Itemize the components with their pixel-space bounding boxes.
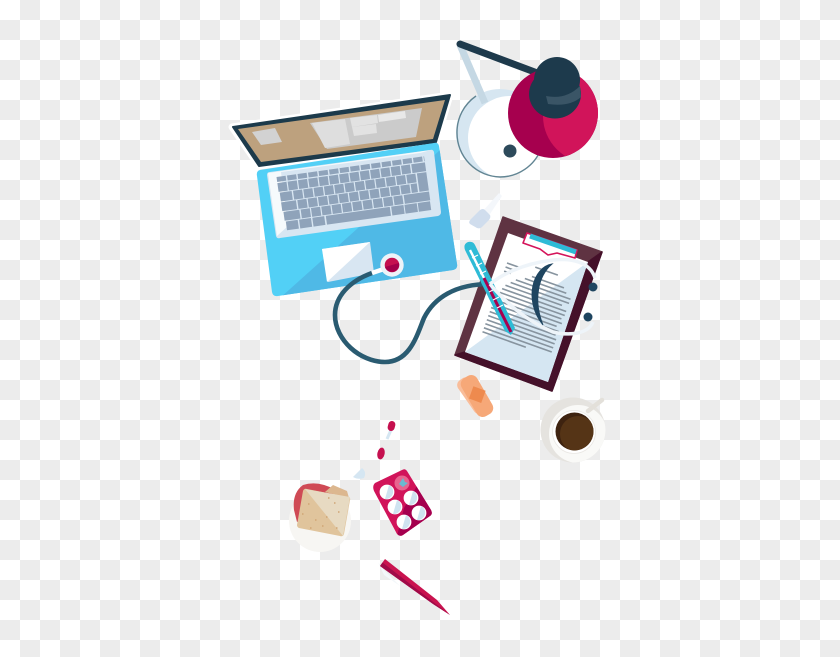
cup handle [588, 400, 602, 411]
used pill [394, 476, 410, 490]
band-aid [455, 372, 496, 420]
medicine bottle [469, 193, 502, 228]
lamp head [508, 57, 598, 158]
clipboard [455, 217, 602, 391]
laptop screen lid [232, 95, 450, 166]
cup and coffee [552, 410, 596, 454]
keyboard panel [267, 150, 441, 238]
stethoscope chest piece [372, 253, 404, 277]
lamp arm [460, 44, 540, 103]
laptop [232, 95, 460, 298]
keyboard keys [277, 159, 431, 226]
plate [289, 490, 351, 552]
desk lamp [456, 40, 598, 178]
bread slice [297, 489, 350, 536]
saucer [540, 398, 607, 463]
coffee cup [540, 398, 607, 463]
laptop base [257, 143, 460, 298]
lamp base [456, 89, 538, 178]
capsule pills [353, 420, 396, 479]
sandwich on plate [289, 483, 351, 552]
trackpad [322, 242, 374, 282]
white pills [380, 485, 426, 529]
clipboard board [455, 217, 602, 391]
paper sheet [465, 233, 588, 382]
stethoscope [335, 253, 490, 362]
back bread slice [325, 485, 349, 498]
stethoscope tube [335, 273, 490, 362]
stethoscope ear tubes [490, 260, 598, 334]
pill blister pack [373, 469, 432, 536]
clipboard clip [523, 233, 577, 258]
thermometer [464, 242, 515, 335]
document text lines [483, 258, 577, 356]
sandwich filling [294, 483, 336, 522]
pen [378, 559, 450, 615]
